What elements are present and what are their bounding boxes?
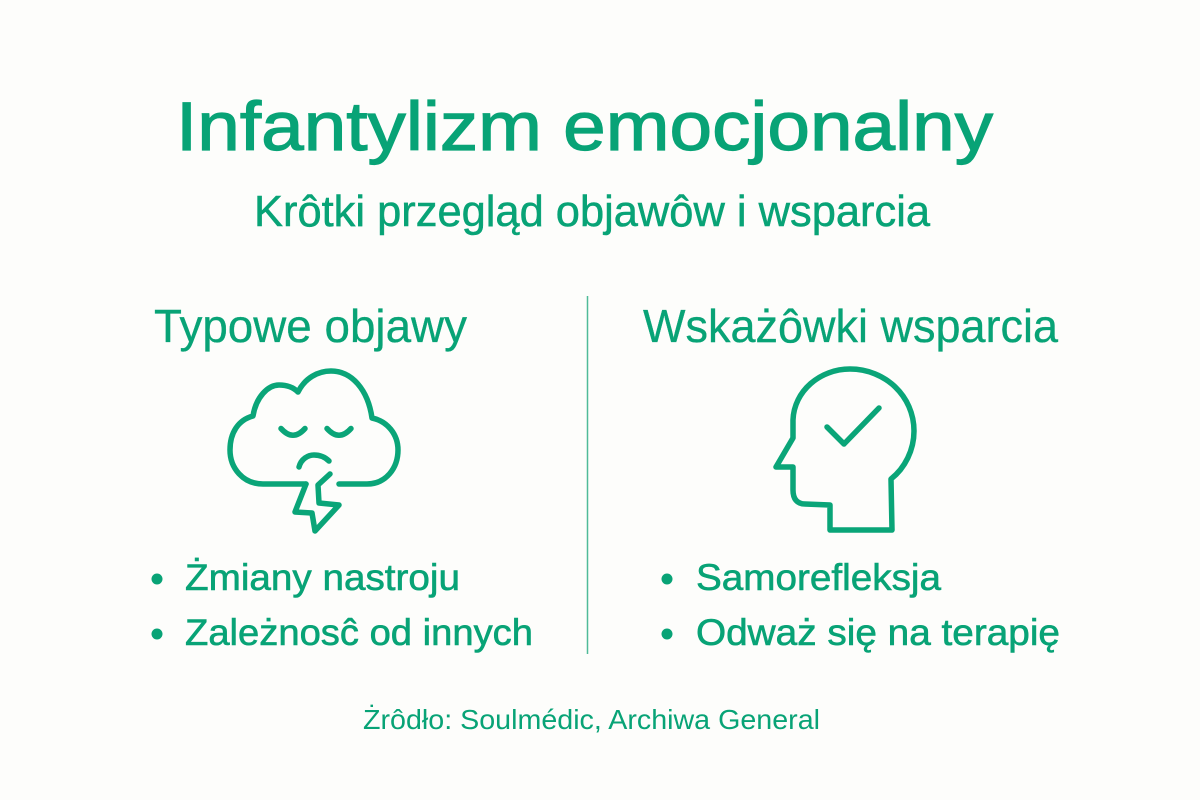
subtitle: Krôtki przegląd objawôw i wsparcia xyxy=(254,187,931,236)
icon: head with check mark xyxy=(776,369,914,530)
panel: support tips xyxy=(643,300,1060,653)
panel: typical symptoms xyxy=(152,300,533,653)
source note: Żrôdło: Soulmédic, Archiwa General xyxy=(363,704,820,735)
divider xyxy=(586,296,588,654)
title: Infantylizm emocjonalny xyxy=(176,88,994,165)
list: symptoms xyxy=(152,557,533,653)
list: tips: Odważ się na terapię xyxy=(696,612,1060,653)
list: tips xyxy=(662,557,1060,653)
heading: typical symptoms: Typowe objawy xyxy=(154,300,467,352)
list: symptoms: Żmiany nastroju xyxy=(185,557,460,598)
list: tips: Samorefleksja xyxy=(696,557,941,598)
list: symptoms: Zależnosĉ od innych xyxy=(185,612,533,653)
icon: sad cloud with lightning xyxy=(230,371,398,531)
heading: support tips: Wskażôwki wsparcia xyxy=(643,300,1058,352)
